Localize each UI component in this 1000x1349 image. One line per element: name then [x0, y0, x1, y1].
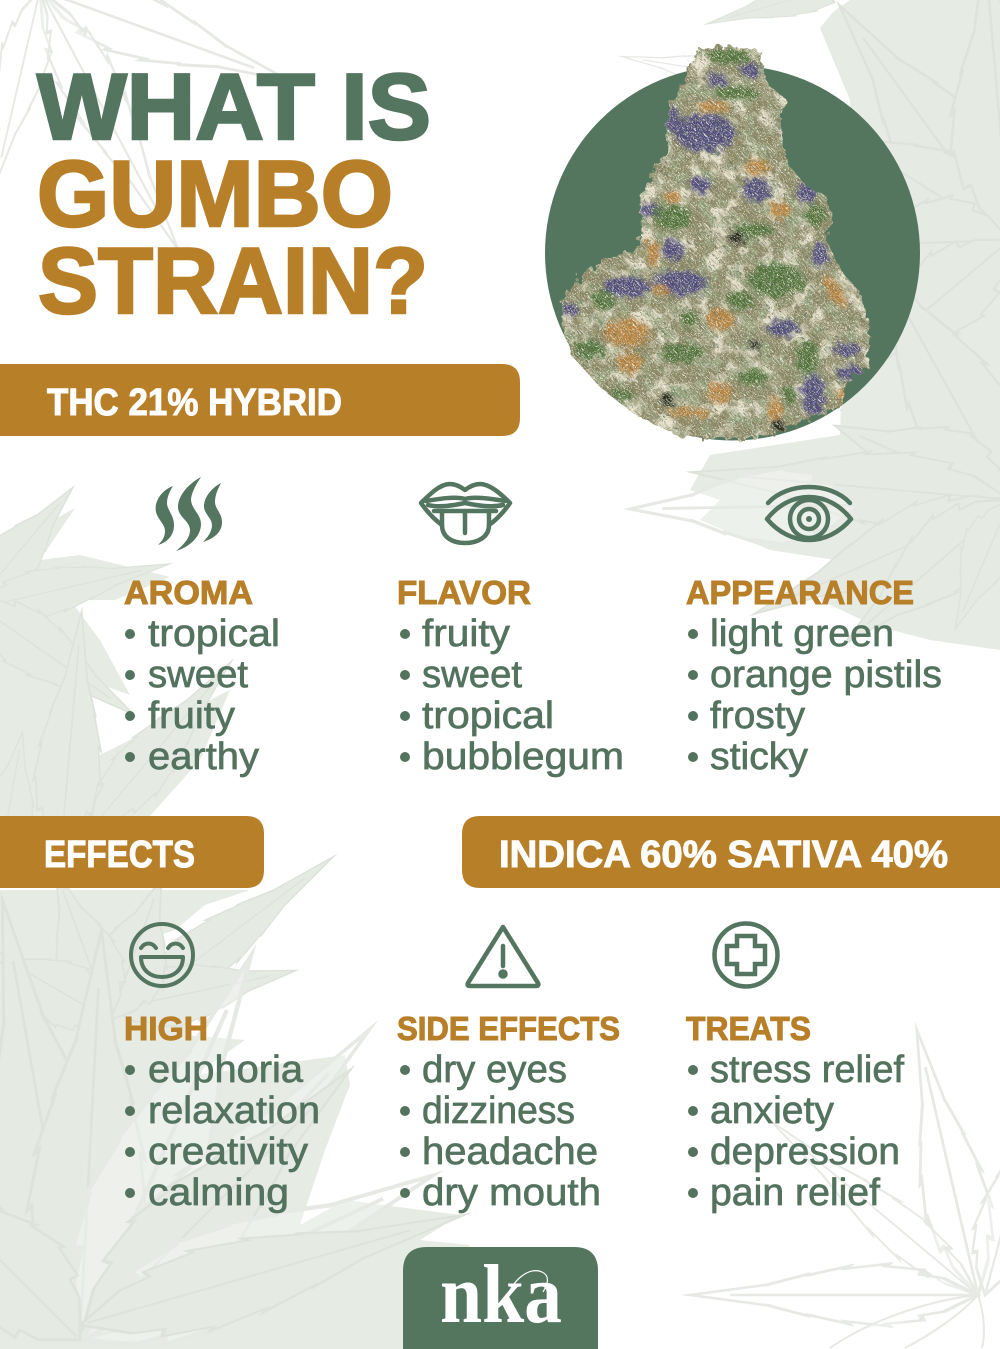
list: side effects — [400, 1049, 601, 1214]
list: high: calming — [148, 1172, 289, 1214]
list: appearance: frosty — [710, 695, 805, 737]
list: appearance: orange pistils — [710, 654, 942, 696]
list: high: creativity — [148, 1131, 308, 1173]
panel: aroma — [124, 574, 280, 778]
logo wordmark: nka — [440, 1248, 562, 1341]
heading: aroma: AROMA — [124, 574, 253, 611]
icon: eye — [767, 487, 851, 540]
list: appearance — [688, 613, 942, 778]
list: aroma — [125, 613, 280, 778]
list: high — [125, 1049, 320, 1214]
list: high: relaxation — [148, 1090, 320, 1132]
list: treats: stress relief — [710, 1049, 904, 1091]
list: side effects: headache — [422, 1131, 598, 1173]
list: appearance: sticky — [710, 736, 808, 778]
list: aroma: sweet — [148, 654, 248, 696]
list: side effects: dry eyes — [422, 1049, 567, 1091]
panel: treats — [686, 1010, 904, 1214]
list: treats — [688, 1049, 904, 1214]
list: aroma: earthy — [148, 736, 259, 778]
logo ring — [506, 1271, 547, 1303]
list: high: euphoria — [148, 1049, 304, 1091]
icon: aroma steam — [156, 477, 222, 551]
heading: appearance: APPEARANCE — [686, 574, 914, 611]
list: aroma: tropical — [148, 613, 280, 655]
logo panel — [403, 1247, 598, 1349]
panel: flavor — [397, 574, 624, 778]
banner: indica and sativa split: INDICA 60% SATIVA 40% — [499, 834, 948, 876]
banner: effects: EFFECTS — [44, 834, 195, 876]
title — [37, 54, 431, 333]
banner: THC 21% hybrid — [0, 364, 520, 436]
list: flavor — [400, 613, 624, 778]
icon: medical cross — [714, 924, 778, 986]
leaves: upper right — [619, 0, 1000, 674]
photo illustration: gumbo bud — [560, 46, 870, 440]
green circle behind bud — [545, 66, 920, 440]
banner: THC 21% hybrid: THC 21% HYBRID — [47, 382, 342, 424]
list: flavor: tropical — [422, 695, 554, 737]
list: flavor: sweet — [422, 654, 522, 696]
list: appearance: light green — [710, 613, 894, 655]
list: treats: anxiety — [710, 1090, 834, 1132]
panel: side effects — [397, 1010, 620, 1214]
banner: indica and sativa split — [462, 816, 1000, 888]
icon: laughing face — [131, 924, 193, 986]
banner: effects — [0, 816, 264, 888]
heading: high: HIGH — [124, 1010, 208, 1047]
list: side effects: dry mouth — [422, 1172, 601, 1214]
leaf outline: top left — [0, 0, 301, 264]
panel: appearance — [686, 574, 942, 778]
list: flavor: fruity — [422, 613, 510, 655]
icon: lips and tongue — [421, 484, 510, 543]
list: treats: depression — [710, 1131, 900, 1173]
heading: flavor: FLAVOR — [397, 574, 531, 611]
title: WHAT IS — [37, 54, 431, 159]
list: flavor: bubblegum — [422, 736, 624, 778]
heading: treats: TREATS — [686, 1010, 811, 1047]
list: side effects: dizziness — [422, 1090, 575, 1132]
title: STRAIN? — [38, 228, 428, 333]
leaf outline: lower right — [690, 1022, 1000, 1348]
title: GUMBO — [37, 141, 393, 246]
list: treats: pain relief — [710, 1172, 880, 1214]
list: aroma: fruity — [148, 695, 235, 737]
panel: high — [124, 1010, 320, 1214]
icon: warning triangle — [468, 927, 538, 986]
heading: side effects: SIDE EFFECTS — [397, 1010, 620, 1047]
leaves: lower left cluster — [0, 834, 476, 1349]
leaves: middle left — [0, 469, 253, 865]
